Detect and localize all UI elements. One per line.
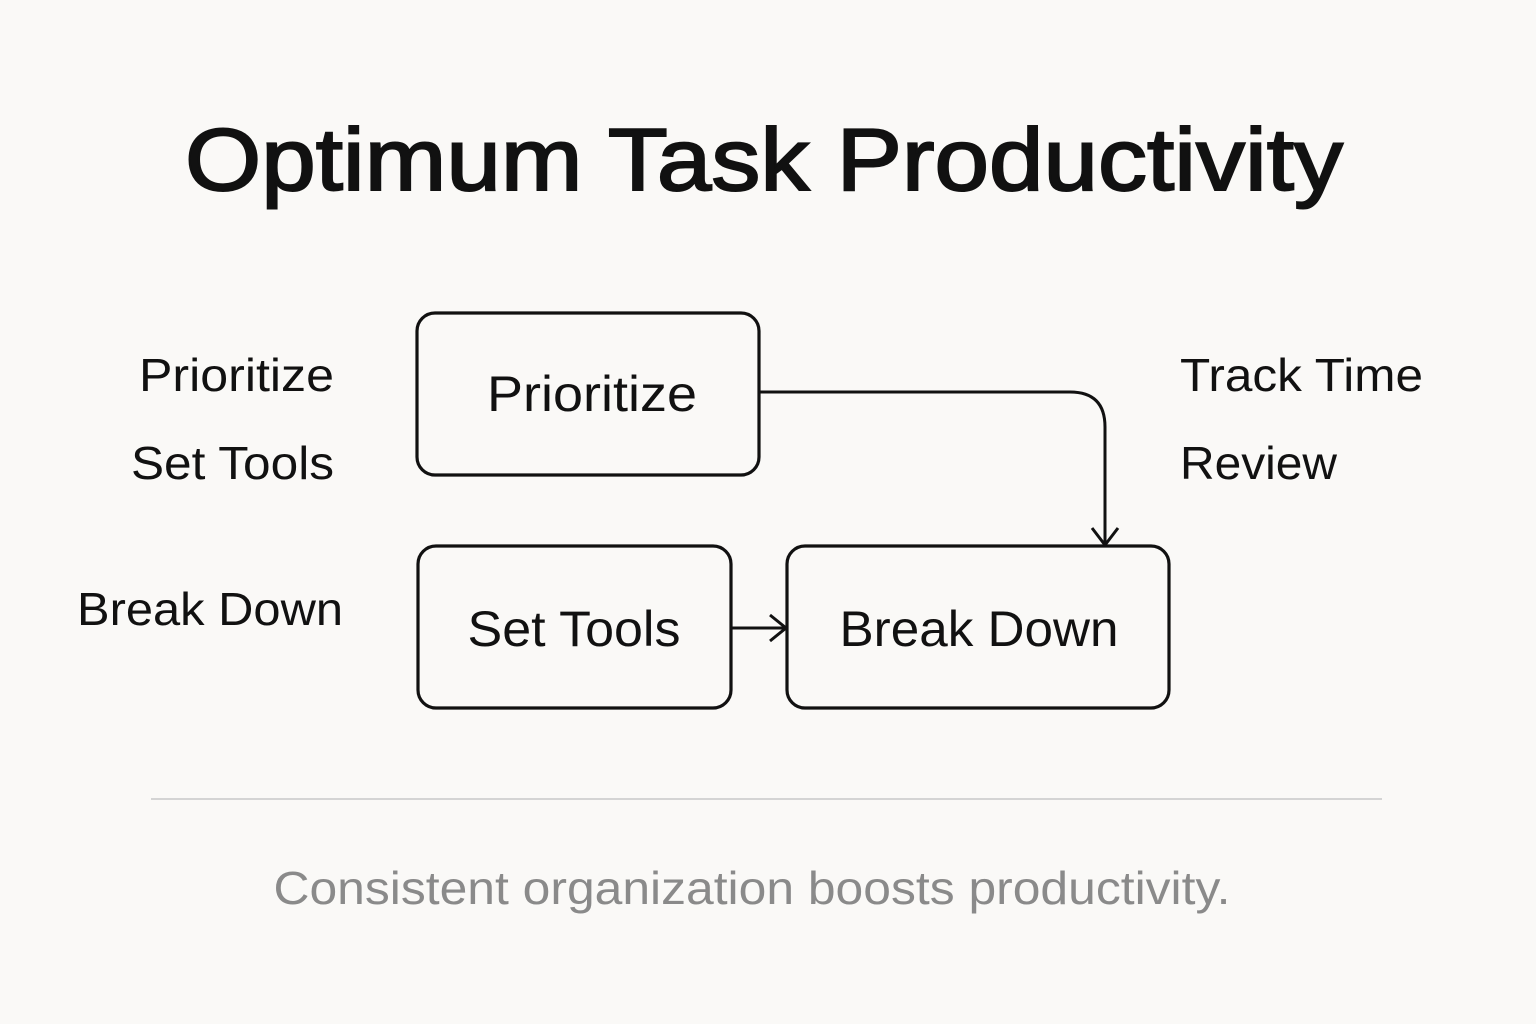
arrow: Prioritize to Break Down: [759, 392, 1118, 545]
box: Break Down: [787, 546, 1169, 708]
title: Optimum Task Productivity: [185, 110, 1343, 209]
box: Prioritize: [417, 313, 759, 475]
box: Prioritize: Prioritize: [487, 366, 697, 422]
left labels: Set Tools: [131, 437, 334, 489]
box: Break Down: Break Down: [840, 601, 1118, 657]
box: Set Tools: Set Tools: [468, 601, 680, 657]
right labels: Track Time: [1180, 349, 1423, 401]
right labels: [1180, 349, 1423, 489]
box: Set Tools: [418, 546, 731, 708]
arrow: Set Tools to Break Down: [731, 615, 786, 641]
left labels: Break Down: [77, 583, 343, 635]
left labels: Prioritize: [139, 349, 334, 401]
footer caption: Consistent organization boosts productivity.: [274, 862, 1230, 914]
right labels: Review: [1180, 437, 1338, 489]
left labels: [77, 349, 343, 635]
